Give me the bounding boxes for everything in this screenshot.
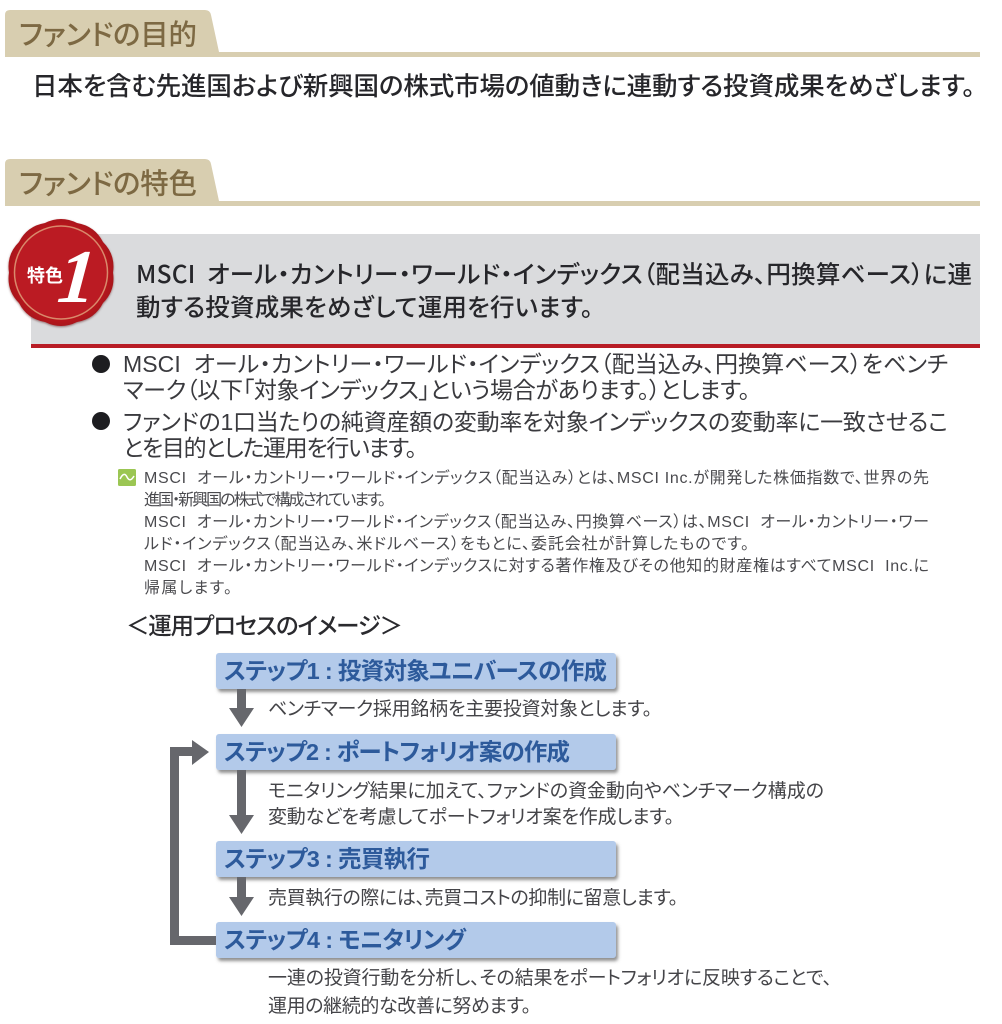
step 1 box xyxy=(216,653,616,689)
step 2 box: ステップ2 : ポートフォリオ案の作成 xyxy=(224,739,570,765)
icon: green wave note marker xyxy=(118,469,136,486)
banner title: 動する投資成果をめざして運用を行います。 xyxy=(136,289,593,324)
step 1 description: ベンチマーク採用銘柄を主要投資対象とします。 xyxy=(268,698,652,720)
step 4 box: ステップ4 : モニタリング xyxy=(224,926,467,953)
arrow: step 1 to 2 xyxy=(229,689,254,727)
note text block: MSCI オール・カントリー・ワールド・インデックス（配当込み、円換算ベース）は、MSCI オール・カントリー・ワー xyxy=(144,512,929,531)
bullet 1: MSCI オール・カントリー・ワールド・インデックス（配当込み、円換算ベース）をベンチ xyxy=(123,351,948,377)
step 1 box: ステップ1 : 投資対象ユニバースの作成 xyxy=(224,658,607,684)
icon: red wax seal badge: 1 xyxy=(55,235,100,319)
banner title: MSCI オール・カントリー・ワールド・インデックス（配当込み、円換算ベース）に連 xyxy=(136,256,972,291)
banner title xyxy=(136,256,972,324)
bullet 2: とを目的とした運用を行います。 xyxy=(123,435,417,461)
heading: fund objective: ファンドの目的 xyxy=(19,20,197,52)
heading: fund features: ファンドの特色 xyxy=(19,168,197,200)
step 4 box xyxy=(216,922,616,958)
feedback loop arrow xyxy=(170,740,216,945)
bullet 2 xyxy=(92,409,948,461)
heading: fund features xyxy=(5,159,980,206)
step 3 description: 売買執行の際には、売買コストの抑制に留意します。 xyxy=(268,887,678,909)
bullet 1: マーク（以下「対象インデックス」という場合があります。）とします。 xyxy=(123,377,750,403)
panel: feature 1 banner xyxy=(31,234,980,348)
icon: red wax seal badge xyxy=(9,219,113,326)
step 2 description xyxy=(268,780,824,828)
note text block: MSCI オール・カントリー・ワールド・インデックスに対する著作権及びその他知的財産権はすべてMSCI Inc.に xyxy=(144,556,929,575)
note text block: ルド・インデックス（配当込み、米ドルベース）をもとに、委託会社が計算したものです。 xyxy=(144,534,749,553)
step 3 box: ステップ3 : 売買執行 xyxy=(224,846,430,872)
note text block: 帰属します。 xyxy=(144,579,232,597)
note text block: 進国・新興国の株式で構成されています。 xyxy=(144,491,386,509)
step 4 description: 一連の投資行動を分析し、その結果をポートフォリオに反映することで、 xyxy=(268,967,832,989)
step 2 description: 変動などを考慮してポートフォリオ案を作成します。 xyxy=(268,806,674,828)
step 4 description: 運用の継続的な改善に努めます。 xyxy=(268,995,531,1017)
step 2 box xyxy=(216,734,616,770)
step 3 box xyxy=(216,841,616,877)
arrow: step 2 to 3 xyxy=(229,770,254,834)
objective statement: 日本を含む先進国および新興国の株式市場の値動きに連動する投資成果をめざします。 xyxy=(32,72,975,101)
arrow: step 3 to 4 xyxy=(229,877,254,916)
note text block xyxy=(144,468,929,597)
process subtitle: ＜運用プロセスのイメージ＞ xyxy=(126,613,403,639)
step 4 description xyxy=(268,967,832,1017)
note text block: MSCI オール・カントリー・ワールド・インデックス（配当込み）とは、MSCI Inc.が開発した株価指数で、世界の先 xyxy=(144,468,929,487)
bullet 2: ファンドの1口当たりの純資産額の変動率を対象インデックスの変動率に一致させるこ xyxy=(123,409,948,435)
step 2 description: モニタリング結果に加えて、ファンドの資金動向やベンチマーク構成の xyxy=(268,780,824,802)
bullet 1 xyxy=(92,351,948,403)
heading: fund objective xyxy=(5,10,980,57)
icon: red wax seal badge: 特色 xyxy=(27,265,63,286)
